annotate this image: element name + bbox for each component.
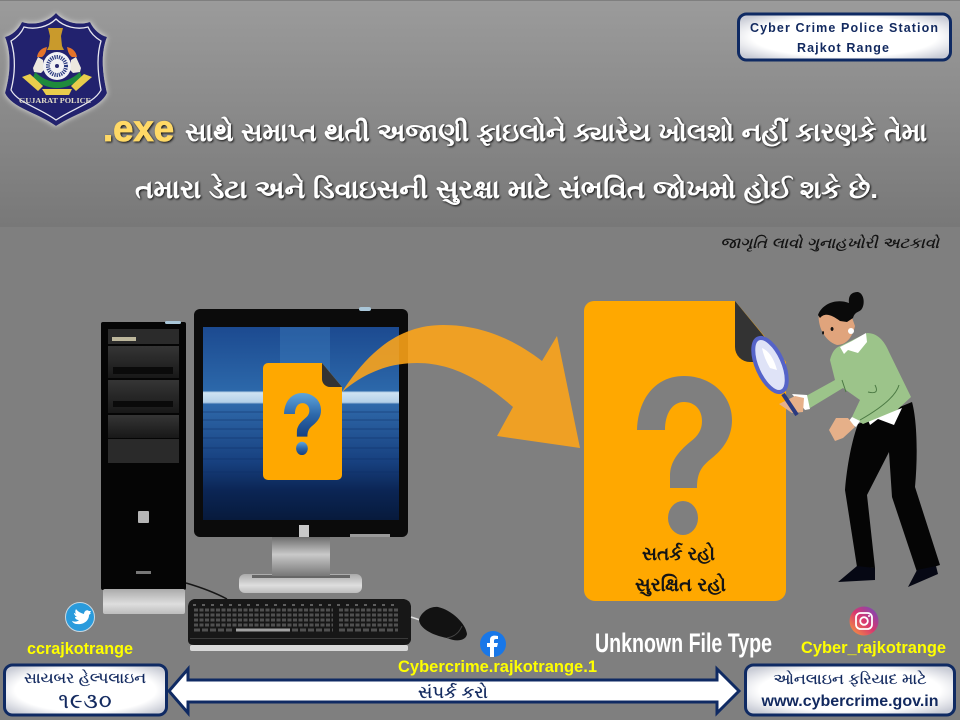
logo: Gujarat Police badge: GUJARAT POLICE bbox=[19, 96, 91, 105]
online complaint box: www.cybercrime.gov.in bbox=[760, 693, 938, 710]
station name box: Rajkot Range bbox=[797, 41, 889, 55]
woman with magnifying glass bbox=[746, 292, 940, 587]
computer tower bbox=[101, 321, 186, 614]
online complaint box: ઓનલાઇન ફરિયાદ માટે bbox=[774, 670, 927, 688]
icon: twitter bbox=[66, 602, 94, 632]
file corner fold bbox=[735, 301, 785, 362]
headline: .exe: .exe bbox=[103, 108, 174, 149]
headline: line 1: સાથે સમાપ્ત થતી અજાણી ફાઇલોને ક્યારેય ખોલશો નહીં કારણકે તેમા bbox=[185, 117, 927, 147]
cuffs bbox=[792, 394, 860, 427]
question mark bbox=[637, 376, 732, 535]
label: facebook handle: Cybercrime.rajkotrange.1 bbox=[398, 658, 597, 676]
station name box: Cyber Crime Police Station bbox=[750, 21, 938, 35]
logo: Gujarat Police badge bbox=[5, 13, 107, 126]
caption: unknown file type: Unknown File Type bbox=[595, 628, 772, 658]
hands bbox=[779, 396, 855, 441]
eyes bbox=[822, 327, 834, 335]
trousers and shoes bbox=[845, 402, 940, 572]
small unknown file icon bbox=[263, 363, 342, 480]
double-headed contact arrow bbox=[169, 669, 739, 713]
magnifying glass bbox=[746, 333, 797, 415]
header band bbox=[0, 1, 960, 227]
label: twitter handle: ccrajkotrange bbox=[27, 640, 133, 658]
curved arrow bbox=[342, 325, 580, 448]
helpline box: સાયબર હેલ્પલાઇન bbox=[24, 669, 146, 687]
icon: facebook bbox=[480, 631, 506, 657]
headline bbox=[103, 108, 927, 205]
station name box bbox=[738, 14, 950, 60]
large unknown file icon bbox=[584, 301, 786, 601]
slogan: stay alert: સતર્ક રહો bbox=[642, 542, 715, 565]
helpline box bbox=[4, 665, 166, 715]
shirt hem bbox=[868, 408, 902, 425]
keyboard bbox=[188, 599, 411, 651]
collar bbox=[840, 333, 867, 354]
online complaint box bbox=[746, 665, 954, 715]
mouse bbox=[411, 607, 467, 640]
hair bbox=[818, 292, 864, 322]
headline: line 2: તમારા ડેટા અને ડિવાઇસની સુરક્ષા માટે સંભવિત જોખમો હોઈ શકે છે. bbox=[135, 174, 878, 205]
earring bbox=[848, 328, 854, 334]
helpline box: ૧૯૩૦ bbox=[58, 690, 112, 713]
neck and face bbox=[819, 312, 855, 345]
computer monitor bbox=[194, 307, 408, 593]
tagline: જાગૃતિ લાવો ગુનાહખોરી અટકાવો bbox=[720, 234, 940, 252]
icon: instagram bbox=[850, 606, 878, 636]
sweater bbox=[806, 333, 911, 424]
cable bbox=[186, 583, 227, 599]
label: instagram handle: Cyber_rajkotrange bbox=[801, 639, 946, 657]
double-headed contact arrow: સંપર્ક કરો bbox=[418, 682, 488, 702]
slogan: stay safe: સુરક્ષિત રહો bbox=[635, 573, 726, 596]
